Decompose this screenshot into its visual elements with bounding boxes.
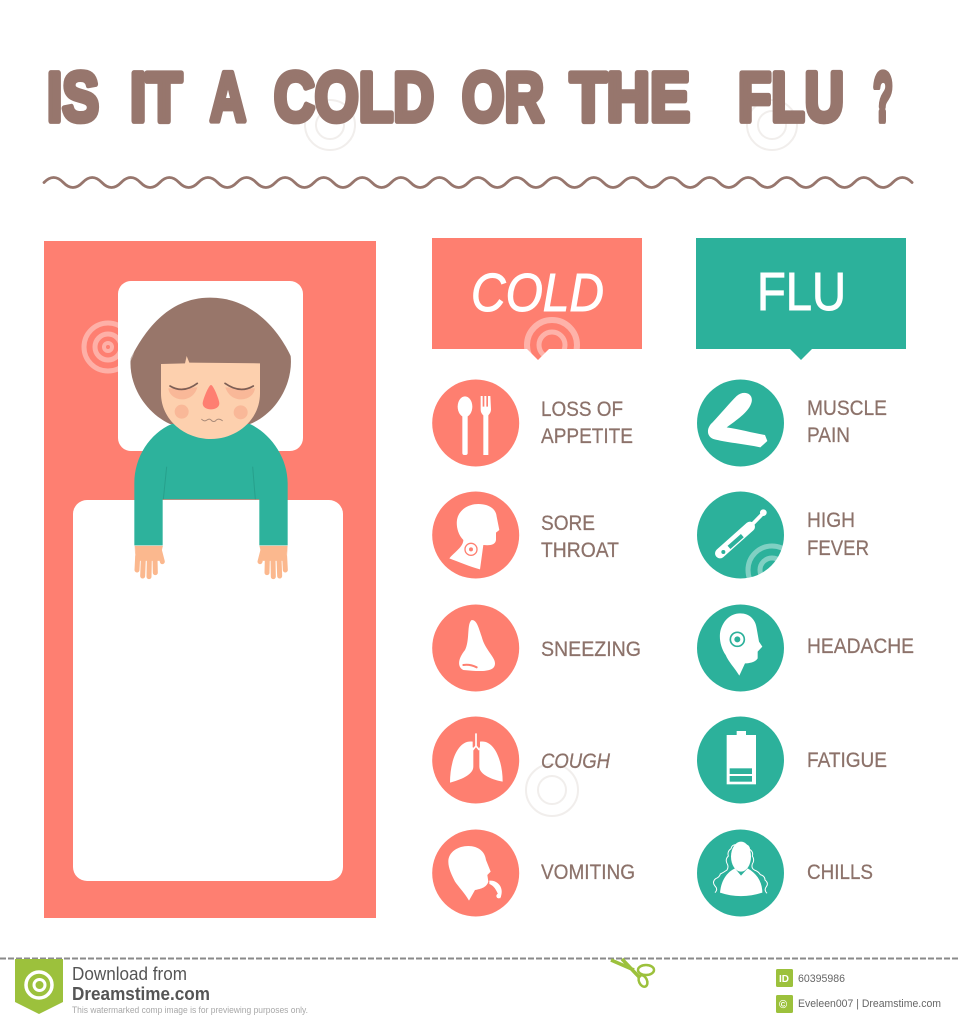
title: THE	[570, 58, 690, 136]
icon: head vomiting	[432, 830, 519, 916]
mouth	[202, 419, 222, 422]
symptom: chills	[697, 830, 873, 916]
label: COUGH	[541, 750, 611, 773]
cold heading: COLD	[471, 263, 604, 323]
cheeks	[175, 405, 248, 419]
title: COLD	[274, 58, 434, 136]
label: MUSCLE	[807, 397, 887, 420]
label: SNEEZING	[541, 638, 641, 661]
eye shadows	[168, 387, 255, 399]
cold banner	[432, 238, 642, 360]
face	[161, 356, 260, 439]
icon: id badge: ID	[779, 974, 789, 985]
title: FLU	[738, 58, 844, 136]
label: CHILLS	[807, 861, 873, 884]
flu banner	[696, 238, 906, 360]
title: IT	[130, 58, 182, 136]
icon: shivering person	[697, 830, 784, 916]
symptom: headache	[697, 604, 914, 692]
symptom: vomiting	[432, 830, 635, 916]
author credit: Eveleen007 | Dreamstime.com	[798, 998, 941, 1010]
pillow	[118, 281, 303, 451]
right hand	[260, 546, 287, 577]
symptom: cough	[432, 716, 611, 804]
footer: watermark strip	[0, 958, 958, 1016]
nose	[203, 385, 219, 409]
symptom: sore throat	[432, 492, 619, 578]
symptom: loss of appetite	[432, 380, 633, 466]
watermark notice: This watermarked comp image is for previewing purposes only.	[72, 1005, 308, 1016]
symptom: high fever	[697, 492, 869, 578]
download text: Download from	[72, 964, 187, 984]
icon: nose	[432, 604, 519, 692]
label: PAIN	[807, 424, 850, 447]
title: A	[210, 58, 246, 136]
icon: lungs	[432, 716, 519, 804]
label: APPETITE	[541, 425, 633, 448]
title: ?	[873, 58, 893, 136]
icon: head with sore throat	[432, 492, 519, 578]
label: THROAT	[541, 539, 619, 562]
icon: thermometer	[697, 492, 784, 578]
download text: Dreamstime.com	[72, 984, 210, 1004]
symptom: sneezing	[432, 604, 641, 692]
image id: 60395986	[798, 973, 845, 985]
icon: arm	[697, 380, 784, 466]
sweater	[134, 424, 288, 545]
closed eyes	[170, 383, 253, 389]
left hand	[135, 546, 163, 577]
label: FATIGUE	[807, 749, 887, 772]
label: HEADACHE	[807, 635, 914, 658]
label: VOMITING	[541, 861, 635, 884]
label: FEVER	[807, 537, 869, 560]
title: OR	[462, 58, 544, 136]
icon: low battery	[697, 716, 784, 804]
icon: copyright badge: ©	[779, 999, 787, 1011]
hair	[130, 298, 291, 424]
symptom: fatigue	[697, 716, 887, 804]
label: HIGH	[807, 509, 855, 532]
icon: spoon and fork	[432, 380, 519, 466]
symptom: muscle pain	[697, 380, 887, 466]
panel: bed with sick girl	[44, 241, 376, 918]
bed frame	[44, 241, 376, 918]
icon: head with pain target	[697, 604, 784, 692]
flu heading: FLU	[757, 262, 846, 322]
sick girl figure	[130, 298, 291, 577]
label: SORE	[541, 512, 595, 535]
blanket	[73, 500, 343, 881]
icon: scissors	[611, 959, 654, 988]
icon: id badge	[776, 969, 793, 987]
icon: dreamstime badge	[15, 959, 63, 1014]
icon: copyright badge	[776, 995, 793, 1013]
label: LOSS OF	[541, 398, 623, 421]
title: IS	[47, 58, 99, 136]
